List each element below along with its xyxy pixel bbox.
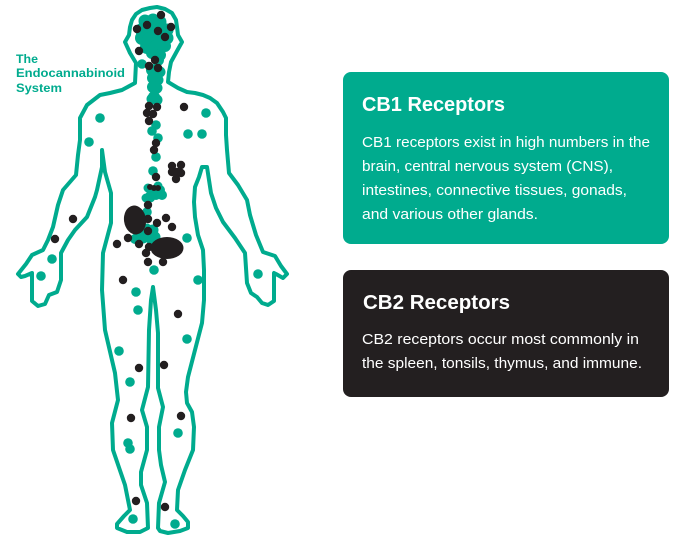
CB1 description: intestines, connective tissues, gonads, (362, 183, 627, 199)
CB2 heading: CB2 Receptors (363, 292, 510, 314)
panel: CB2 receptors (343, 270, 669, 397)
CB1 description: and various other glands. (362, 207, 538, 223)
head dots (133, 11, 175, 72)
CB1 description: brain, central nervous system (CNS), (362, 159, 613, 175)
CB1 description: CB1 receptors exist in high numbers in the (362, 135, 650, 151)
CB2 description: CB2 receptors occur most commonly in (362, 332, 639, 348)
body outline figure (18, 7, 287, 533)
left organ (kidney) (122, 204, 148, 236)
title: The Endocannabinoid System: The (16, 52, 38, 66)
title: The Endocannabinoid System: Endocannabinoid (16, 66, 125, 80)
title: The Endocannabinoid System (16, 52, 125, 95)
black receptor dots (51, 11, 188, 511)
arm, torso and leg dots (36, 108, 263, 529)
CB2 description (362, 332, 642, 372)
title: The Endocannabinoid System: System (16, 81, 62, 95)
CB1 description (362, 135, 650, 223)
CB1 heading: CB1 Receptors (362, 94, 505, 116)
panel: CB1 receptors (343, 72, 669, 244)
spine cluster (130, 54, 167, 247)
teal receptor dots (36, 14, 263, 529)
right organ (spleen) (150, 237, 184, 259)
head cluster (135, 14, 174, 61)
spine and torso dots (113, 102, 188, 266)
arm and leg dots (51, 215, 185, 511)
CB2 description: the spleen, tonsils, thymus, and immune. (362, 356, 642, 372)
